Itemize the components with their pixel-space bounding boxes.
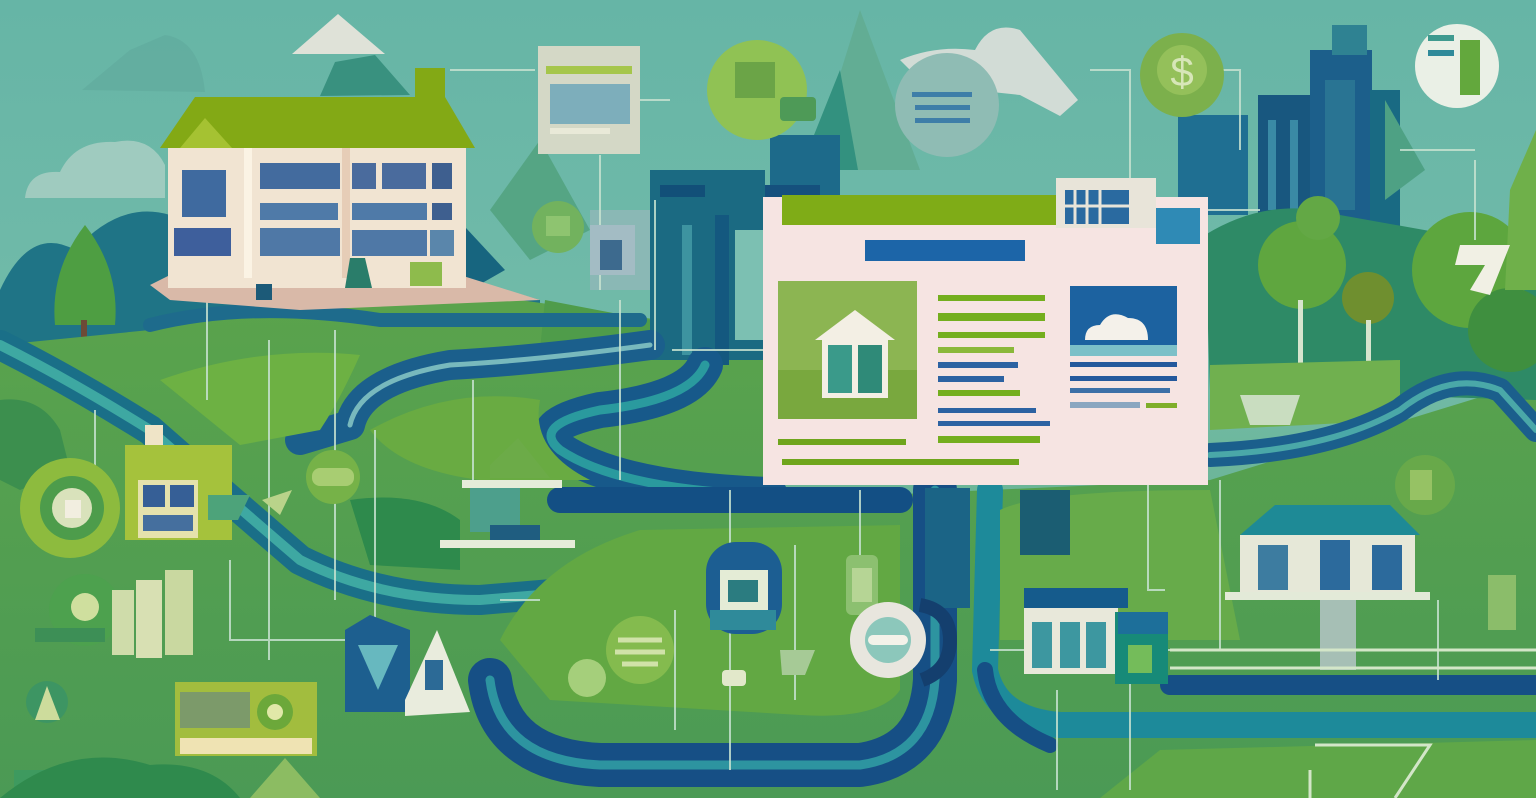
icon: blue folder with house bbox=[345, 615, 470, 716]
green landscape bbox=[0, 300, 1536, 798]
icon: white ring badge bbox=[850, 602, 950, 680]
building window tile bbox=[1056, 178, 1200, 244]
river network bbox=[0, 311, 1536, 765]
lower-left foliage bbox=[0, 757, 320, 798]
background: faint clouds and skyline bbox=[25, 10, 1425, 290]
panel: lower-centre office bbox=[1024, 588, 1168, 684]
panel: school building bbox=[150, 68, 540, 310]
tower column beside the main card bbox=[650, 170, 765, 365]
icon: arrow marker bbox=[262, 490, 292, 515]
green fields bbox=[160, 353, 1536, 798]
icon: city block bbox=[35, 570, 193, 658]
icon: recycling symbols bbox=[568, 616, 815, 697]
icon: chart badge bbox=[1415, 24, 1499, 108]
icon: picnic shelter bbox=[440, 438, 575, 548]
window header bar bbox=[782, 195, 1056, 225]
icon: top document card bbox=[538, 46, 640, 154]
horizontal walkways bbox=[1170, 650, 1536, 798]
icon: small grey house bbox=[590, 225, 635, 275]
dark green patches bbox=[0, 300, 650, 490]
icon: dollar coin bbox=[1140, 33, 1224, 117]
icon: right-side green tag bbox=[1395, 455, 1516, 630]
icon: document lines bbox=[895, 53, 999, 157]
image tile: cloud and sea bbox=[1070, 286, 1177, 408]
icon: lower-left pin bbox=[14, 681, 68, 788]
bottom text lines bbox=[778, 439, 1019, 465]
icon: small green badge bbox=[532, 201, 584, 253]
left hill and trees bbox=[0, 200, 540, 400]
panel: lower-right house bbox=[1225, 505, 1430, 670]
right side greenery bbox=[1205, 130, 1536, 430]
icon: tall label tag bbox=[846, 555, 878, 615]
icon: left yellow-green house bbox=[125, 425, 250, 540]
panel: main web page card bbox=[763, 178, 1208, 485]
text lines: middle column bbox=[938, 295, 1050, 443]
icon: recycling circle bbox=[20, 458, 120, 558]
image tile: house bbox=[778, 281, 917, 419]
icon: dollar coin: $ bbox=[1170, 48, 1194, 95]
panel: lower-left sign bbox=[175, 682, 317, 756]
icon: small round badge bbox=[306, 450, 360, 504]
blue title bar bbox=[865, 240, 1025, 261]
icon: green chat circle bbox=[707, 40, 816, 140]
icon: blue lock badge bbox=[706, 542, 782, 634]
